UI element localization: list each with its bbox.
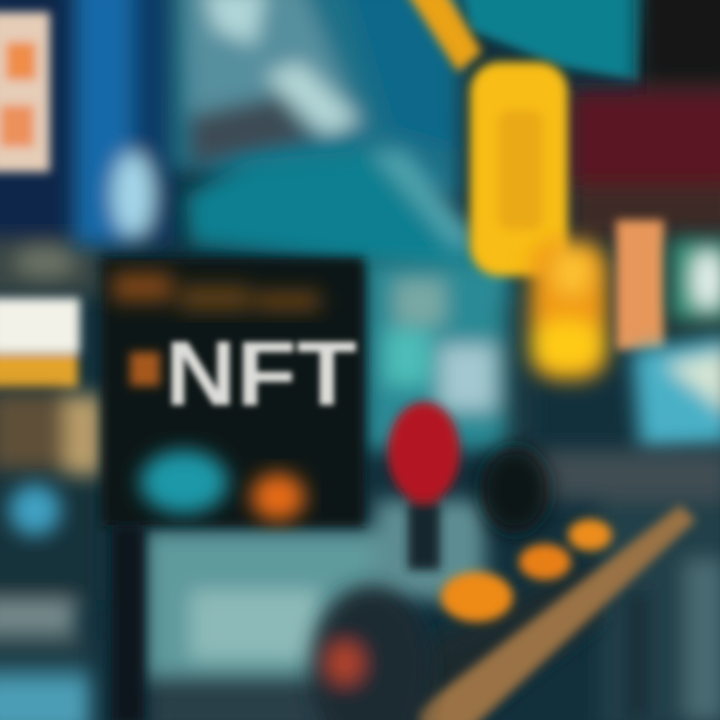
teal shop front xyxy=(365,260,531,490)
left tan shop interior xyxy=(0,392,103,475)
orange lights row xyxy=(441,519,612,622)
yellow diagonal bracket xyxy=(405,0,482,72)
diagonal tan rail xyxy=(415,505,696,720)
teal building upper facade xyxy=(170,0,460,200)
orange column xyxy=(616,220,664,350)
white and orange sign top left xyxy=(0,12,50,172)
red balloon xyxy=(388,402,460,570)
light blue screen right xyxy=(632,335,720,450)
dark top right with red wall xyxy=(570,0,720,340)
teal round light left xyxy=(9,484,61,536)
teal oval on sign xyxy=(140,450,228,514)
orange lower lantern xyxy=(530,240,608,380)
NFT text: NFT xyxy=(165,323,357,425)
yellow lantern xyxy=(470,62,568,276)
foreground person xyxy=(310,585,430,720)
dark figure xyxy=(480,446,550,534)
lower right street and dark posts xyxy=(530,450,720,720)
green and white sign right xyxy=(672,240,720,320)
sign pole xyxy=(112,525,144,720)
black NFT sign panel xyxy=(102,258,364,526)
lower centre teal wall xyxy=(145,500,485,720)
orange blob on sign xyxy=(251,473,305,521)
left awning white and orange xyxy=(0,298,80,388)
blue column xyxy=(74,0,174,245)
teal awning xyxy=(185,150,490,280)
orange square on sign xyxy=(130,352,160,386)
orange heading on sign xyxy=(112,272,320,311)
left storefront column xyxy=(0,0,100,720)
top teal hanging sign xyxy=(462,0,650,82)
dark street beneath rail xyxy=(410,560,600,720)
